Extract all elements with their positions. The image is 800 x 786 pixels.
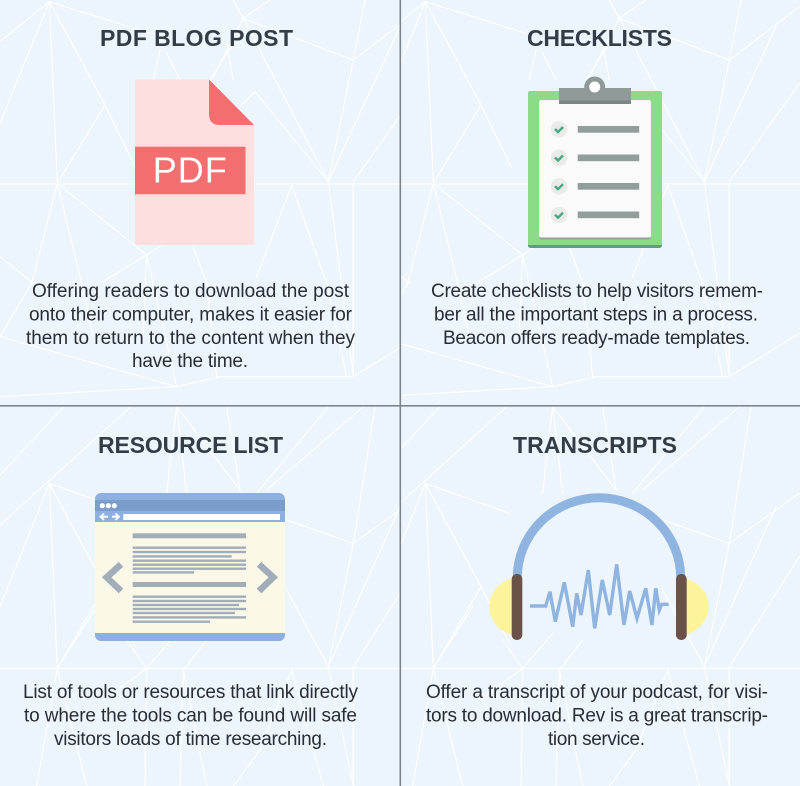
heading: resource list: RESOURCE LIST [98, 432, 283, 458]
icon: clipboard [528, 76, 662, 248]
text block: PDF blog post description: Offering readers to download the post [32, 281, 350, 302]
icon: PDF document [135, 80, 254, 245]
text block: transcripts description [426, 682, 768, 750]
text block: resource list description: visitors loads of time researching. [54, 729, 327, 750]
icon: PDF document: PDF [153, 150, 227, 191]
text block: checklists description: Beacon offers ready-made templates. [443, 328, 750, 349]
text block: resource list description [23, 682, 358, 750]
text block: resource list description: to where the tools can be found will safe [24, 706, 357, 726]
panel: transcripts [426, 432, 768, 750]
text block: checklists description: ber all the important steps in a process. [434, 304, 758, 326]
panel: PDF blog post [26, 25, 356, 372]
icon: browser window [95, 493, 285, 641]
text block: PDF blog post description [26, 281, 356, 372]
heading: transcripts: TRANSCRIPTS [513, 432, 677, 458]
text block: transcripts description: tion service. [548, 729, 645, 750]
panel: resource list [23, 432, 358, 750]
text block: transcripts description: tors to download. Rev is a great transcrip- [426, 706, 768, 726]
text block: PDF blog post description: onto their computer, makes it easier for [29, 304, 353, 326]
heading: checklists: CHECKLISTS [527, 25, 672, 51]
text block: resource list description: List of tools or resources that link directly [23, 682, 358, 703]
heading: PDF blog post: PDF BLOG POST [100, 25, 293, 51]
text block: checklists description [431, 281, 763, 349]
text block: PDF blog post description: have the time. [132, 351, 248, 372]
text block: transcripts description: Offer a transcript of your podcast, for visi- [426, 682, 768, 703]
icon: headphones with waveform [489, 498, 709, 640]
text block: PDF blog post description: them to return to the content when they [26, 328, 356, 349]
text block: checklists description: Create checklists to help visitors remem- [431, 281, 763, 302]
panel: checklists [431, 25, 763, 349]
